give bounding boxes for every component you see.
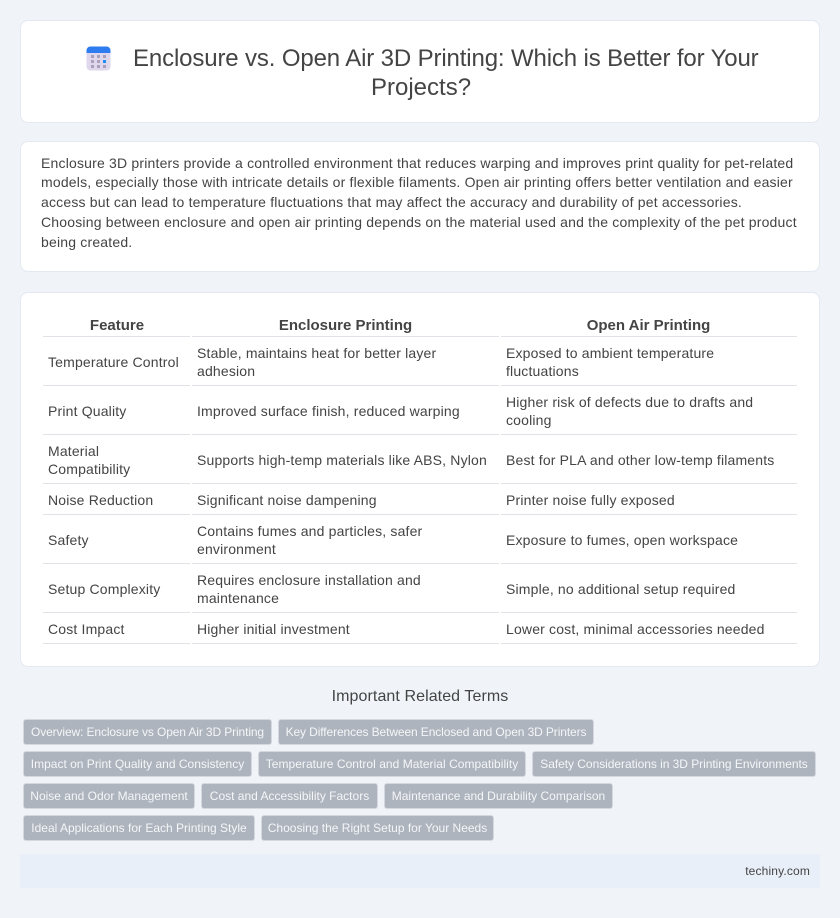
- row: print quality: cooling: [506, 412, 552, 428]
- row: setup complexity: Setup Complexity: [48, 581, 160, 597]
- row: setup complexity: Simple, no additional setup required: [506, 581, 735, 597]
- row: material compatibility: [48, 443, 774, 477]
- footer source: techiny.com: [745, 864, 810, 878]
- header panel: [20, 20, 820, 123]
- row: cost impact: [48, 621, 765, 637]
- summary text: models, especially those with intricate details or flexible filaments. Open air printing offers better ventilation and easier: [41, 174, 793, 190]
- row: setup complexity: [48, 572, 735, 606]
- tag row 2: Impact on Print Quality and Consistency: [31, 757, 244, 771]
- title: Projects?: [371, 74, 471, 101]
- tag row 3: Maintenance and Durability Comparison: [392, 789, 605, 803]
- row: setup complexity: maintenance: [197, 590, 279, 606]
- row: print quality: Improved surface finish, reduced warping: [197, 403, 460, 419]
- row: safety: Safety: [48, 532, 89, 548]
- title: Enclosure vs. Open Air 3D Printing: Which is Better for Your: [133, 45, 759, 72]
- table header: Feature: [90, 317, 144, 334]
- related terms heading: Important Related Terms: [332, 688, 508, 705]
- row: temperature control: Exposed to ambient temperature: [506, 345, 714, 361]
- row: noise reduction: Noise Reduction: [48, 492, 153, 508]
- row: noise reduction: Printer noise fully exposed: [506, 492, 675, 508]
- table header: Enclosure Printing: [279, 317, 412, 334]
- table header: [90, 317, 710, 334]
- tag row 3: Cost and Accessibility Factors: [210, 789, 369, 803]
- summary text: Choosing between enclosure and open air printing depends on the material used and the complexity of the pet product: [41, 214, 797, 230]
- row: safety: Exposure to fumes, open workspace: [506, 532, 738, 548]
- tag row 4: Ideal Applications for Each Printing Style: [31, 821, 247, 835]
- title: [133, 45, 759, 101]
- row: noise reduction: [48, 492, 675, 508]
- panel: comparison table: [20, 292, 820, 667]
- tag row 4: [23, 815, 494, 841]
- row: cost impact: Cost Impact: [48, 621, 125, 637]
- row: material compatibility: Best for PLA and other low-temp filaments: [506, 452, 774, 468]
- tag row 2: Temperature Control and Material Compatibility: [266, 757, 518, 771]
- summary text: Enclosure 3D printers provide a controlled environment that reduces warping and improves print quality for pet-related: [41, 155, 793, 171]
- row: safety: [48, 523, 738, 557]
- row: setup complexity: Requires enclosure installation and: [197, 572, 421, 588]
- row: print quality: Higher risk of defects due to drafts and: [506, 394, 753, 410]
- row: print quality: [48, 394, 753, 428]
- tag row 1: [23, 719, 594, 745]
- tag row 1: Overview: Enclosure vs Open Air 3D Printing: [31, 725, 264, 739]
- table header: Open Air Printing: [587, 317, 710, 334]
- row: temperature control: fluctuations: [506, 363, 579, 379]
- tag row 4: Choosing the Right Setup for Your Needs: [268, 821, 487, 835]
- row: temperature control: Temperature Control: [48, 354, 179, 370]
- related terms tags: [23, 719, 816, 841]
- panel: summary: [20, 141, 820, 272]
- row: cost impact: Lower cost, minimal accessories needed: [506, 621, 765, 637]
- row: material compatibility: Supports high-temp materials like ABS, Nylon: [197, 452, 487, 468]
- summary text: [41, 155, 797, 250]
- tag row 2: Safety Considerations in 3D Printing Environments: [540, 757, 808, 771]
- tag row 3: Noise and Odor Management: [30, 789, 188, 803]
- tag row 1: Key Differences Between Enclosed and Open 3D Printers: [286, 725, 586, 739]
- row: temperature control: adhesion: [197, 363, 255, 379]
- row: temperature control: Stable, maintains heat for better layer: [197, 345, 436, 361]
- row: safety: Contains fumes and particles, safer: [197, 523, 422, 539]
- summary text: access but can lead to temperature fluctuations that may affect the accuracy and durability of pet accessories.: [41, 194, 742, 210]
- summary text: being created.: [41, 234, 132, 250]
- tag row 3: [23, 783, 613, 809]
- row: print quality: Print Quality: [48, 403, 126, 419]
- tag row 2: [23, 751, 816, 777]
- footer bar: [20, 854, 820, 888]
- row: safety: environment: [197, 541, 276, 557]
- icon: calendar: [86, 46, 110, 70]
- row: noise reduction: Significant noise dampening: [197, 492, 377, 508]
- row: temperature control: [48, 345, 714, 379]
- row: material compatibility: Compatibility: [48, 461, 130, 477]
- row: material compatibility: Material: [48, 443, 99, 459]
- row: cost impact: Higher initial investment: [197, 621, 350, 637]
